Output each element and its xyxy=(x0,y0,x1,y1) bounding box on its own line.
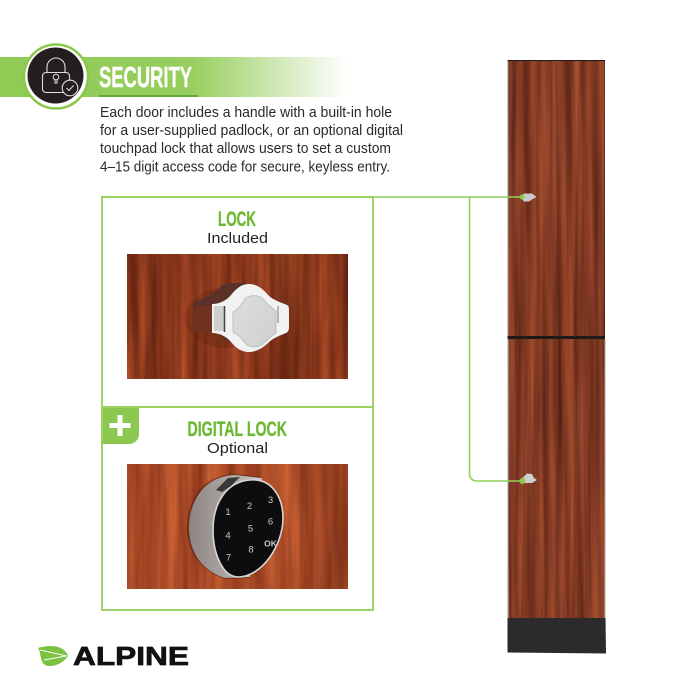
connector: lock panel to lower door xyxy=(470,197,526,484)
description text: for a user-supplied padlock, or an optional digital xyxy=(100,123,403,139)
description text: Each door includes a handle with a built-in hole xyxy=(100,105,392,121)
photo: wood door with touchpad lock xyxy=(127,464,348,589)
photo: wood door with touchpad lock: 6 xyxy=(268,516,273,528)
panel: included lock xyxy=(127,208,348,379)
badge: plus xyxy=(103,408,139,444)
logo: alpine xyxy=(38,641,189,671)
photo: wood door with touchpad lock: 1 xyxy=(225,507,231,518)
description text: 4–15 digit access code for secure, keyless entry. xyxy=(100,160,390,176)
photo: wood door with touchpad lock: 2 xyxy=(247,501,252,512)
panel: lock options frame xyxy=(102,197,373,610)
wordmark: ALPINE xyxy=(73,641,189,671)
heading: digital lock: DIGITAL LOCK xyxy=(188,418,287,441)
header band xyxy=(0,57,348,97)
title: SECURITY xyxy=(99,62,192,94)
photo: wood door with touchpad lock: 7 xyxy=(226,552,231,564)
lower door handle xyxy=(520,474,537,483)
label: included: Included xyxy=(207,231,268,247)
description text: touchpad lock that allows users to set a custom xyxy=(100,141,391,157)
photo: wood door with touchpad lock: 5 xyxy=(248,524,253,534)
photo: wood door with touchpad lock: 8 xyxy=(248,544,254,556)
locker base xyxy=(508,618,606,654)
photo: wood door with touchpad lock: OK xyxy=(264,538,278,548)
upper door handle xyxy=(520,194,536,202)
locker xyxy=(508,60,606,654)
label: optional: Optional xyxy=(207,441,268,457)
icon: padlock badge xyxy=(24,44,88,108)
photo: wood door with touchpad lock: 3 xyxy=(268,495,273,506)
photo: wood door with keyed handle xyxy=(127,254,348,379)
heading: lock: LOCK xyxy=(218,208,256,231)
description text xyxy=(100,105,403,176)
photo: wood door with touchpad lock: 4 xyxy=(225,530,231,542)
locker upper door xyxy=(508,60,605,339)
panel: optional digital lock xyxy=(103,408,348,589)
connector: lock panel to upper door xyxy=(373,194,524,200)
icon: leaf xyxy=(38,646,68,666)
locker lower door xyxy=(508,339,606,618)
